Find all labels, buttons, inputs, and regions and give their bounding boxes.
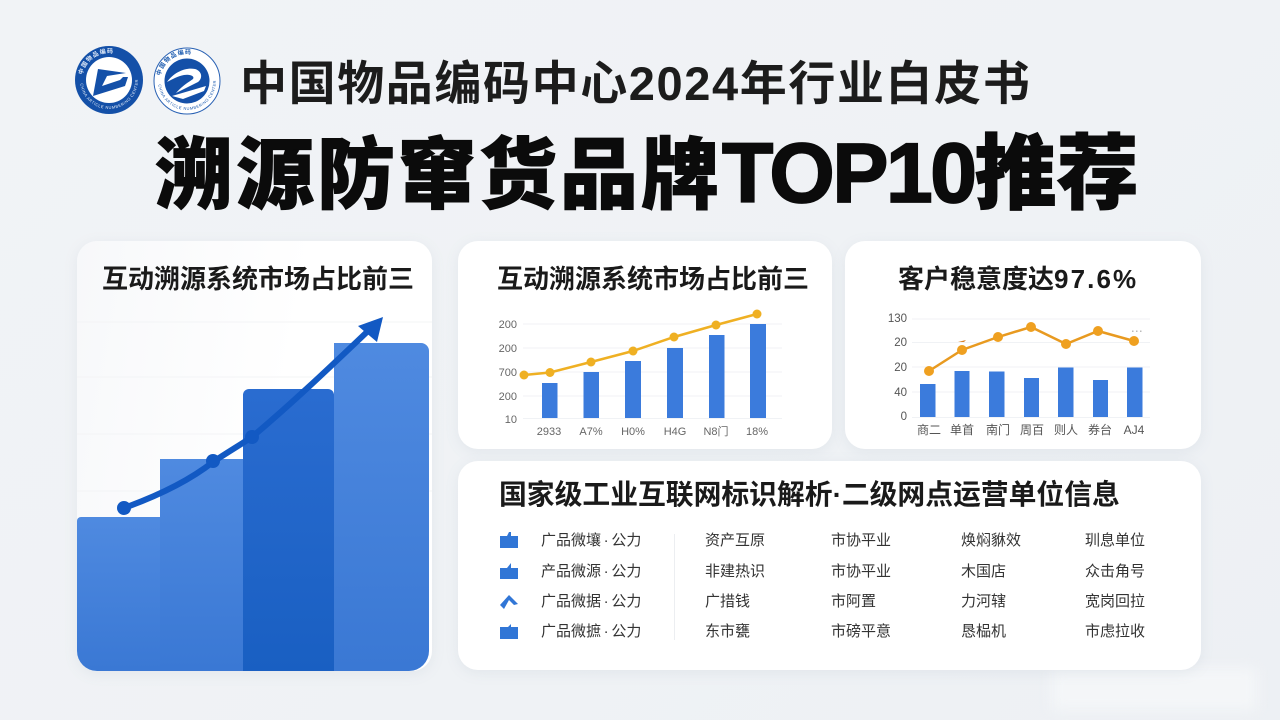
subtitle heading: 中国物品编码中心2024年行业白皮书	[240, 57, 1031, 110]
table row 1: 广品微壤 · 公力	[541, 532, 641, 549]
combo chart: bars and yellow line: H0%	[621, 426, 645, 438]
bar 4	[334, 343, 429, 671]
table row 3: 广措钱	[705, 593, 750, 610]
combo chart: bars and yellow line: A7%	[579, 426, 603, 438]
chart: rising blue bars with arrow	[77, 317, 432, 671]
combo chart: bars and orange line: AJ4	[1124, 423, 1145, 437]
combo chart: bars and orange line: 20	[894, 337, 907, 349]
panel: operator information table	[458, 461, 1201, 670]
panel: left growth chart	[77, 241, 432, 671]
combo chart: bars and orange line: 40	[894, 387, 907, 399]
combo chart: bars and orange line: 南门	[986, 422, 1010, 437]
table row 3: 市阿置	[831, 593, 876, 610]
combo chart: bars and orange line: 0	[901, 411, 907, 423]
table row 2: 非建热识	[705, 563, 765, 580]
table row 3: 力河辖	[961, 593, 1006, 610]
combo chart: bars and yellow line: 200	[499, 391, 517, 403]
watermark patch	[1052, 668, 1257, 710]
table row 4: 市磅平意	[831, 623, 891, 640]
heading: satisfaction: 客户稳意度达97.6%	[898, 264, 1138, 294]
bar 2	[160, 459, 243, 671]
combo chart: bars and yellow line: 2933	[537, 426, 561, 438]
table row 3	[500, 593, 1145, 610]
table row 3: 广品微据 · 公力	[541, 593, 641, 610]
table row 2: 众击角号	[1085, 563, 1145, 580]
table row 1: 资产互原	[705, 532, 765, 549]
heading: operator information: 国家级工业互联网标识解析·二级网点运营单位信息	[499, 479, 1120, 510]
table row 1: 焕焖貅效	[961, 532, 1021, 549]
panel: satisfaction chart	[845, 241, 1201, 449]
logo one	[75, 46, 143, 114]
table row 2	[500, 563, 1145, 580]
table row 4: 恳榀机	[961, 623, 1006, 640]
logo one: CHINA ARTICLE NUMBERING CENTER	[80, 80, 138, 109]
logo one: 中国物品编码	[78, 48, 113, 74]
column divider	[674, 534, 675, 640]
combo chart: bars and orange line: 商二	[917, 422, 941, 437]
icon: chevron	[500, 595, 518, 609]
table row 2: 木国店	[961, 563, 1006, 580]
combo chart: bars and orange line: 单首	[950, 423, 974, 437]
table row 1: 市协平业	[831, 532, 891, 549]
bar 1	[77, 517, 160, 671]
combo chart: bars and yellow line: 18%	[746, 426, 768, 438]
icon: thumb bar 1	[500, 532, 518, 548]
table row 4	[500, 623, 1145, 640]
trend arrow	[117, 317, 383, 515]
panel: share trend chart	[458, 241, 832, 449]
heading: share trend: 互动溯源系统市场占比前三	[497, 264, 809, 294]
logos header group	[75, 46, 220, 114]
logo two: 中国物品编码	[156, 49, 191, 75]
heading: left panel: 互动溯源系统市场占比前三	[102, 264, 414, 294]
icon: thumb bar 2	[500, 563, 518, 579]
combo chart: bars and yellow line: N8门	[703, 424, 729, 438]
table row 4: 市虑拉收	[1085, 623, 1145, 640]
icon: case	[500, 624, 518, 639]
combo chart: bars and yellow line: 200	[499, 319, 517, 331]
combo chart: bars and orange line	[888, 313, 1150, 437]
combo chart: bars and yellow line: 700	[499, 367, 517, 379]
logo two	[154, 48, 220, 114]
table row 2: 产品微源 · 公力	[541, 563, 641, 580]
bar 3	[243, 389, 334, 671]
combo chart: bars and yellow line: 10	[505, 414, 517, 426]
table row 1: 玔息单位	[1085, 532, 1145, 549]
combo chart: bars and orange line: 则人	[1054, 423, 1078, 437]
table row 2: 市协平业	[831, 563, 891, 580]
table row 4: 广品微摭 · 公力	[541, 623, 641, 640]
logo two: CHINA ARTICLE NUMBERING CENTER	[158, 80, 216, 110]
combo chart: bars and yellow line: 200	[499, 343, 517, 355]
combo chart: bars and orange line: 20	[894, 362, 907, 374]
table row 3: 宽岗回拉	[1085, 593, 1145, 610]
combo chart: bars and orange line: 周百	[1020, 423, 1044, 437]
table row 1	[500, 532, 1145, 549]
combo chart: bars and orange line: 券台	[1088, 422, 1112, 437]
combo chart: bars and yellow line	[499, 310, 782, 438]
combo chart: bars and yellow line: H4G	[664, 426, 686, 438]
main title: 溯源防窜货品牌TOP10推荐	[155, 126, 1139, 220]
table row 4: 东市甕	[705, 623, 750, 640]
combo chart: bars and orange line: 130	[888, 313, 907, 325]
